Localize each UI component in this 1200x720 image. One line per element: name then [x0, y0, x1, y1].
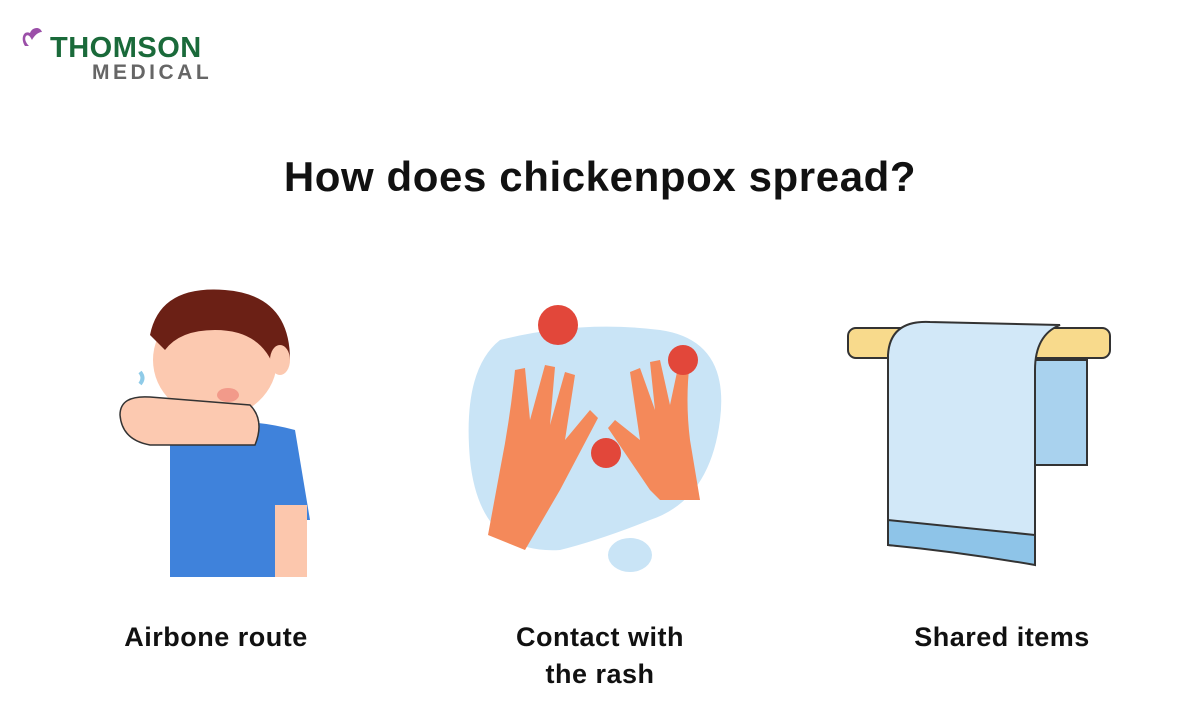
icon: boy sneezing	[119, 290, 310, 577]
icon: hands with rash	[468, 305, 722, 572]
label: contact: the rash	[545, 659, 655, 689]
logo text: THOMSON	[50, 32, 202, 64]
logo: MEDICAL	[92, 61, 212, 84]
label: airborne: Airbone route	[124, 622, 308, 652]
label: contact: Contact with	[516, 622, 684, 652]
icon: towel on rack	[847, 320, 1111, 566]
label: shared items: Shared items	[914, 622, 1090, 652]
title: How does chickenpox spread?	[284, 153, 916, 200]
icon: butterfly heart	[22, 28, 42, 46]
label: contact	[516, 622, 684, 689]
logo	[22, 28, 212, 84]
